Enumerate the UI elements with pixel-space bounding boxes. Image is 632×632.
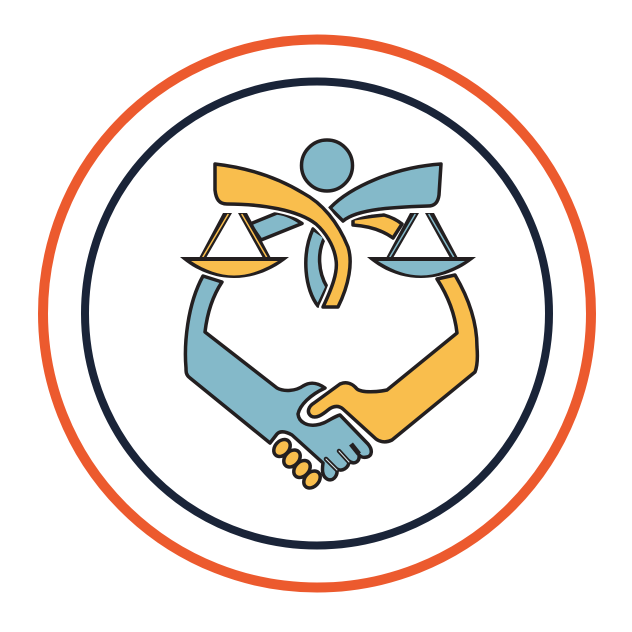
- yellow fingers: [270, 436, 324, 491]
- left scale: [180, 213, 289, 278]
- small blue beam left: [250, 213, 302, 240]
- icon: head: [302, 140, 352, 191]
- right scale: [367, 213, 476, 278]
- blue arm and hand: [185, 276, 371, 480]
- right scale frame: [385, 213, 459, 260]
- blue centre ribbon: [306, 229, 327, 306]
- emblem: [180, 140, 477, 491]
- right pan: [367, 257, 476, 278]
- finger creases: [326, 444, 359, 470]
- inner navy ring: [85, 82, 549, 546]
- small yellow beam right: [353, 215, 402, 238]
- yellow arm and hand: [308, 275, 477, 442]
- left scale frame: [198, 213, 272, 260]
- white gap around blue wing: [330, 164, 441, 221]
- outer orange ring: [43, 40, 591, 588]
- left pan: [180, 257, 289, 278]
- blue right wing: [330, 164, 441, 221]
- yellow left wing ribbon: [215, 164, 350, 307]
- white gap around yellow ribbon: [215, 164, 350, 307]
